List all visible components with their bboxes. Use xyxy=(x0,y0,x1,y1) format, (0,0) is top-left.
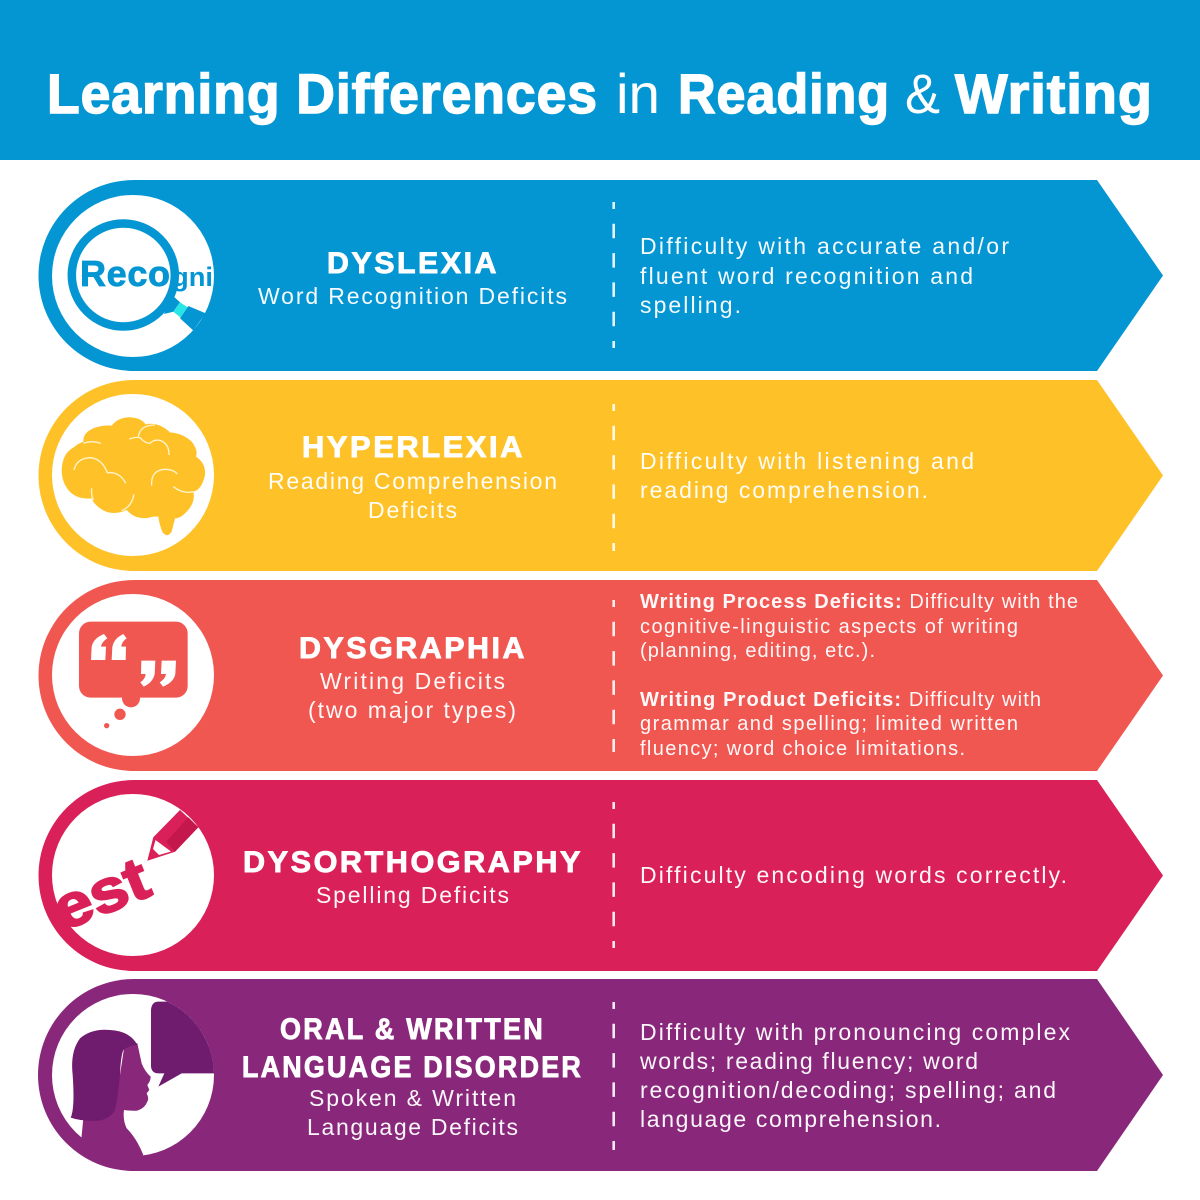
description: oral and written language disorder: recognition/decoding; spelling; and xyxy=(640,1077,1056,1103)
description: dysgraphia: Writing Process Deficits: Difficulty with the xyxy=(640,591,1078,613)
heading: dysgraphia: DYSGRAPHIA xyxy=(299,632,527,665)
subheading: spoken and written language deficits: Language Deficits xyxy=(307,1114,518,1140)
description: dysgraphia: fluency; word choice limitations. xyxy=(640,738,965,760)
icon: magnifying glass over word xyxy=(72,224,213,330)
icon: profile silhouette with speech bubble xyxy=(71,1002,214,1162)
title: in xyxy=(616,62,660,125)
panel: dysorthography xyxy=(38,780,1163,971)
heading: oral and written language disorder: LANGUAGE DISORDER xyxy=(242,1051,583,1084)
description: dysgraphia: Writing Product Deficits: Difficulty with xyxy=(640,689,1041,711)
panel: oral and written language disorder xyxy=(38,979,1163,1171)
description: dyslexia xyxy=(640,233,1009,318)
title: & xyxy=(905,62,940,125)
subheading: word recognition deficits: Word Recognition Deficits xyxy=(258,283,567,309)
title: Writing xyxy=(955,62,1153,125)
subheading: writing deficits xyxy=(308,668,516,723)
title: Reading xyxy=(678,62,890,125)
icon: speech bubble with quotes xyxy=(79,622,188,728)
heading: oral and written language disorder xyxy=(242,1013,583,1084)
subheading: spoken and written language deficits: Spoken & Written xyxy=(309,1085,516,1111)
description: dyslexia: Difficulty with accurate and/or xyxy=(640,233,1009,259)
subheading: reading comprehension deficits: Reading Comprehension xyxy=(268,468,557,494)
description: oral and written language disorder: language comprehension. xyxy=(640,1106,941,1132)
heading: dyslexia: DYSLEXIA xyxy=(327,247,499,280)
description: oral and written language disorder: words; reading fluency; word xyxy=(639,1048,978,1074)
description: dysgraphia: grammar and spelling; limited written xyxy=(640,713,1018,735)
icon: pencil writing word xyxy=(43,810,198,943)
description: hyperlexia: Difficulty with listening and xyxy=(640,448,974,474)
icon: pencil writing word: est xyxy=(43,844,159,943)
subheading: writing deficits: Writing Deficits xyxy=(320,668,505,694)
description: dysgraphia xyxy=(640,591,1078,760)
subheading: spoken and written language deficits xyxy=(307,1085,518,1140)
icon: magnifying glass over word: gni xyxy=(172,262,213,292)
title xyxy=(47,62,1153,125)
description: dyslexia: fluent word recognition and xyxy=(640,263,973,289)
description: hyperlexia: reading comprehension. xyxy=(640,477,928,503)
heading: hyperlexia: HYPERLEXIA xyxy=(302,431,525,464)
description: oral and written language disorder: Difficulty with pronouncing complex xyxy=(640,1019,1070,1045)
heading: dysorthography: DYSORTHOGRAPHY xyxy=(243,846,583,879)
panel: dysgraphia xyxy=(38,580,1163,771)
title: Learning Differences xyxy=(47,62,598,125)
panel: dyslexia xyxy=(38,180,1163,371)
icon: brain xyxy=(62,417,205,535)
description: hyperlexia xyxy=(640,448,974,503)
header banner xyxy=(0,0,1200,160)
icon: magnifying glass over word: Reco xyxy=(80,253,170,294)
description: dysgraphia: (planning, editing, etc.). xyxy=(640,640,875,662)
panel: hyperlexia xyxy=(38,380,1163,571)
description: dyslexia: spelling. xyxy=(640,292,741,318)
description: oral and written language disorder xyxy=(639,1019,1070,1132)
subheading: spelling deficits: Spelling Deficits xyxy=(316,882,509,908)
subheading: reading comprehension deficits: Deficits xyxy=(368,497,457,523)
subheading: reading comprehension deficits xyxy=(268,468,557,523)
subheading: writing deficits: (two major types) xyxy=(308,697,516,723)
description: dysorthography: Difficulty encoding words correctly. xyxy=(640,862,1067,888)
description: dysgraphia: cognitive-linguistic aspects of writing xyxy=(640,616,1018,638)
heading: oral and written language disorder: ORAL & WRITTEN xyxy=(280,1013,545,1046)
